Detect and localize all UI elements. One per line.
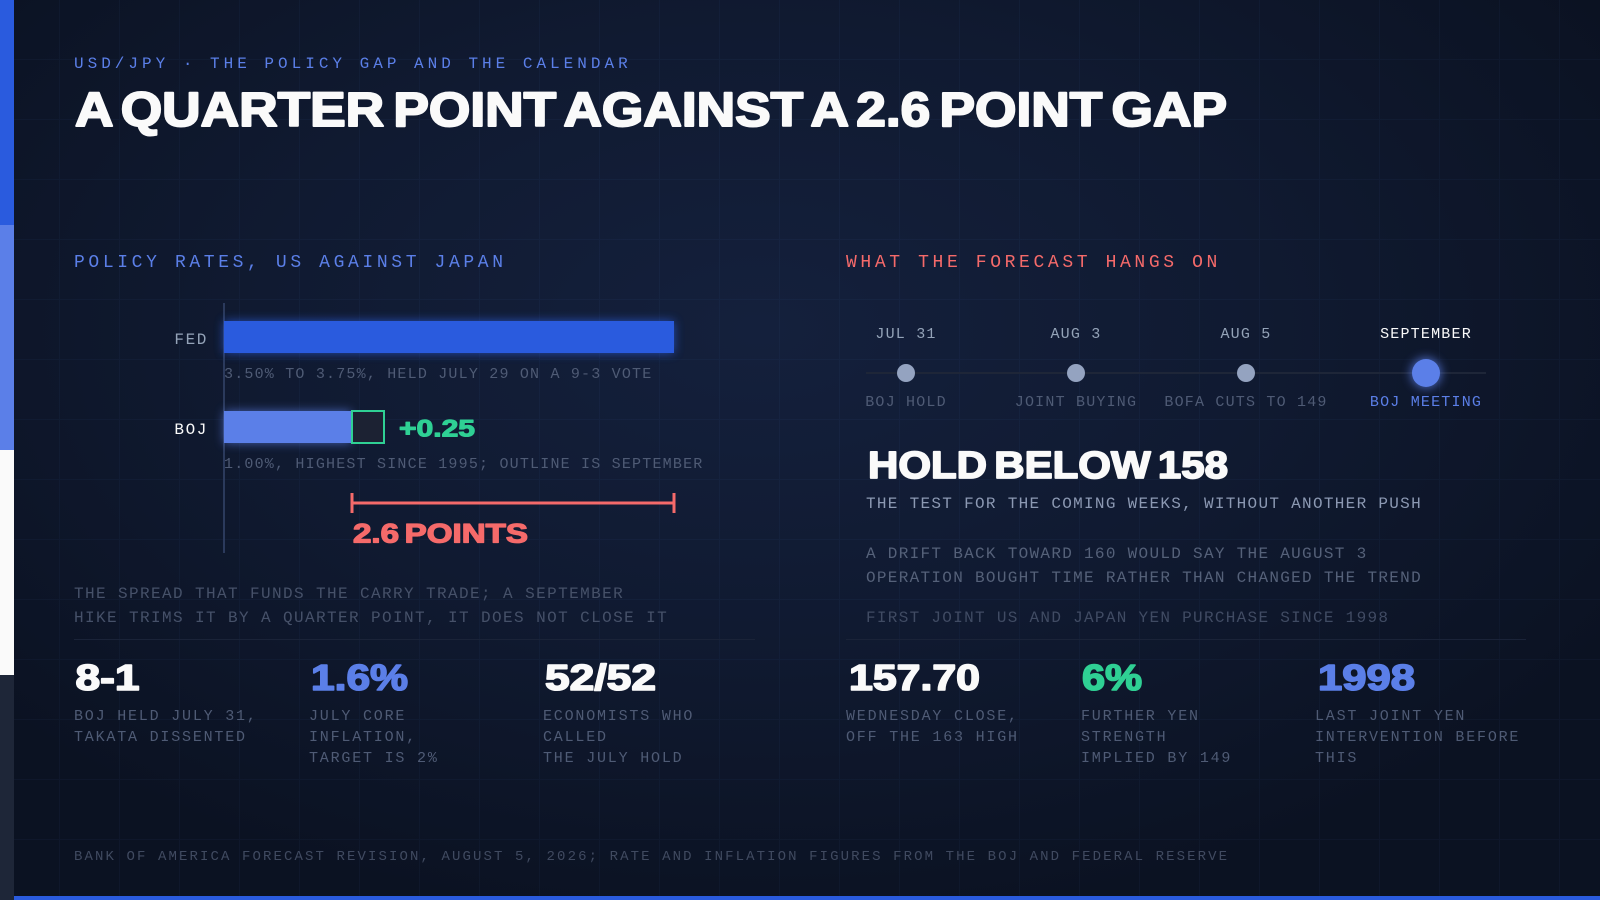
event: September: SEPTEMBER [1380, 326, 1472, 343]
bar: Fed: 3.50% TO 3.75%, HELD JULY 29 ON A 9-3 VOTE [224, 366, 652, 383]
stat: 1998 [1315, 657, 1520, 767]
bar: Fed: FED [174, 331, 208, 349]
left colour strip [0, 0, 14, 900]
title: A QUARTER POINT AGAINST A 2.6 POINT GAP [75, 84, 1227, 137]
panel: forecast [846, 253, 1486, 627]
stat: 1.6%: TARGET IS 2% [309, 750, 439, 767]
text: spread note: THE SPREAD THAT FUNDS THE CARRY TRADE; A SEPTEMBER [74, 585, 624, 603]
gap bracket: 2.6 POINTS [353, 518, 528, 548]
stat: 6%: FURTHER YEN [1081, 708, 1200, 725]
stat: 8-1: BOJ HELD JULY 31, [74, 708, 258, 725]
event: Aug 3 [1015, 326, 1137, 411]
heading: policy rates: POLICY RATES, US AGAINST JAPAN [74, 253, 507, 273]
text: test line: THE TEST FOR THE COMING WEEKS, WITHOUT ANOTHER PUSH [866, 495, 1422, 513]
stat: 157.70: WEDNESDAY CLOSE, [846, 708, 1019, 725]
bar: Fed [174, 321, 674, 383]
stat: 6% [1081, 657, 1232, 767]
event: Jul 31: JUL 31 [875, 326, 937, 343]
stat: 6%: 6% [1082, 657, 1142, 698]
stat: 52/52 [543, 657, 694, 767]
event: Aug 5: AUG 5 [1220, 326, 1272, 343]
event: Jul 31: BOJ HOLD [865, 394, 947, 411]
bar: BOJ with September outline: 1.00%, HIGHEST SINCE 1995; OUTLINE IS SEPTEMBER [224, 456, 703, 473]
stat: 157.70: 157.70 [849, 657, 980, 698]
text: drift note: A DRIFT BACK TOWARD 160 WOULD SAY THE AUGUST 3 [866, 545, 1367, 563]
gap bracket [352, 493, 674, 548]
timeline [865, 326, 1486, 411]
event: September [1370, 326, 1482, 411]
stat: 52/52: 52/52 [545, 657, 656, 698]
stat: 8-1: 8-1 [76, 657, 140, 698]
stat: 1998: THIS [1315, 750, 1358, 767]
heading: forecast: WHAT THE FORECAST HANGS ON [846, 253, 1221, 273]
event: Jul 31 [865, 326, 947, 411]
stat: 6%: STRENGTH [1081, 729, 1167, 746]
stat: 52/52: THE JULY HOLD [543, 750, 683, 767]
stat: 1998: 1998 [1318, 657, 1415, 698]
stat: 1.6% [309, 657, 439, 767]
stat: 1.6%: 1.6% [311, 657, 408, 698]
event: Aug 3: JOINT BUYING [1015, 394, 1137, 411]
stat: 52/52: CALLED [543, 729, 608, 746]
bar chart: policy rates [174, 303, 703, 553]
stat: 8-1 [74, 657, 258, 746]
event: Aug 5: BOFA CUTS TO 149 [1164, 394, 1328, 411]
panel: policy rates [74, 253, 703, 627]
text: spread note [74, 585, 668, 627]
text: first joint purchase: FIRST JOINT US AND JAPAN YEN PURCHASE SINCE 1998 [866, 609, 1389, 627]
bar: BOJ with September outline: BOJ [174, 421, 208, 439]
stat: 6%: IMPLIED BY 149 [1081, 750, 1232, 767]
stat: 8-1: TAKATA DISSENTED [74, 729, 247, 746]
event: Aug 5 [1164, 326, 1328, 411]
eyebrow: USD/JPY · THE POLICY GAP AND THE CALENDAR [74, 55, 632, 73]
bottom rule [14, 896, 1600, 900]
source line: BANK OF AMERICA FORECAST REVISION, AUGUST 5, 2026; RATE AND INFLATION FIGURES FROM THE BOJ AND FEDERAL RESERVE [74, 849, 1229, 865]
text: drift note [866, 545, 1422, 587]
stat: 1998: INTERVENTION BEFORE [1315, 729, 1520, 746]
stat: 157.70: OFF THE 163 HIGH [846, 729, 1019, 746]
event: Aug 3: AUG 3 [1050, 326, 1102, 343]
stat: 52/52: ECONOMISTS WHO [543, 708, 694, 725]
text: spread note: HIKE TRIMS IT BY A QUARTER POINT, IT DOES NOT CLOSE IT [74, 609, 668, 627]
bar: BOJ with September outline [174, 411, 703, 473]
stat: 1.6%: JULY CORE [309, 708, 406, 725]
event: September: BOJ MEETING [1370, 394, 1482, 411]
callout: hold below 158: HOLD BELOW 158 [868, 445, 1228, 487]
stat: 1.6%: INFLATION, [309, 729, 417, 746]
text: drift note: OPERATION BOUGHT TIME RATHER THAN CHANGED THE TREND [866, 569, 1422, 587]
stat: 1998: LAST JOINT YEN [1315, 708, 1466, 725]
bar: BOJ with September outline: +0.25 [399, 416, 475, 442]
stat: 157.70 [846, 657, 1019, 746]
